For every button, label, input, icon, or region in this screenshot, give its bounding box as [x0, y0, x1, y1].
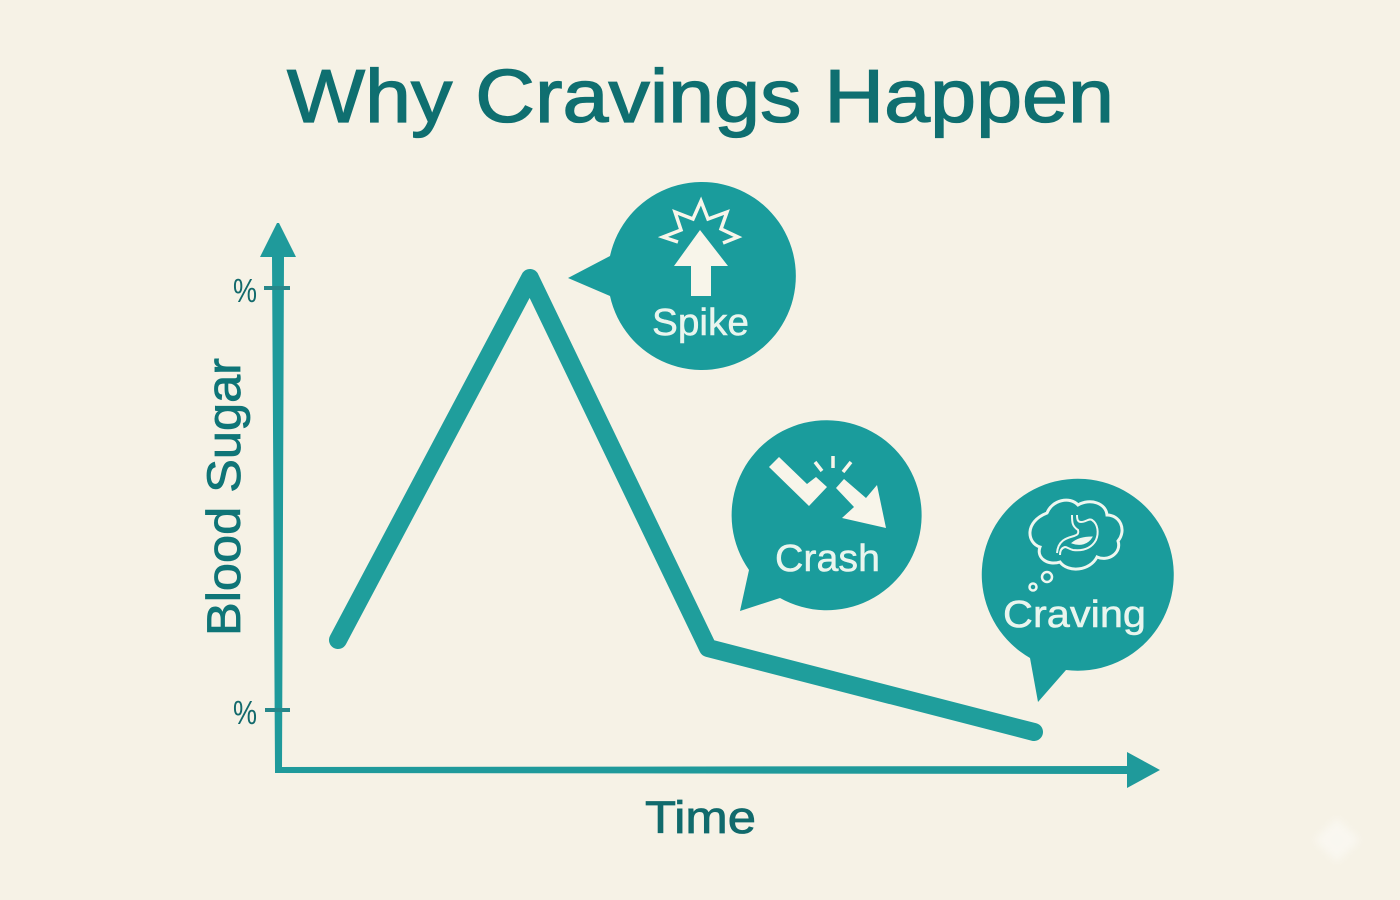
craving bubble [982, 479, 1174, 702]
y axis high percent label: % [233, 272, 257, 309]
x axis arrow [275, 752, 1160, 788]
blood sugar line [338, 278, 1034, 732]
spike label: Spike [652, 302, 749, 344]
y axis low tick [265, 708, 290, 712]
callout: craving [982, 479, 1174, 702]
craving label: Craving [1003, 594, 1146, 636]
chart: blood sugar over time [197, 223, 1160, 843]
x axis title: Time [645, 792, 756, 843]
y axis title: Blood Sugar [197, 358, 250, 636]
callout: crash [732, 420, 922, 611]
crash label: Crash [775, 538, 880, 580]
icon: burst and up arrow [663, 201, 738, 296]
callout: spike [568, 182, 796, 370]
icon: thought cloud with stomach [1030, 500, 1122, 590]
y axis arrow [260, 223, 296, 770]
watermark sparkle [1314, 818, 1360, 862]
crash bubble [732, 420, 922, 611]
spike bubble [568, 182, 796, 370]
y axis low percent label: % [233, 694, 257, 731]
y axis high tick [264, 286, 290, 290]
title: Why Cravings Happen [287, 54, 1114, 138]
icon: broken down arrow [769, 456, 886, 528]
